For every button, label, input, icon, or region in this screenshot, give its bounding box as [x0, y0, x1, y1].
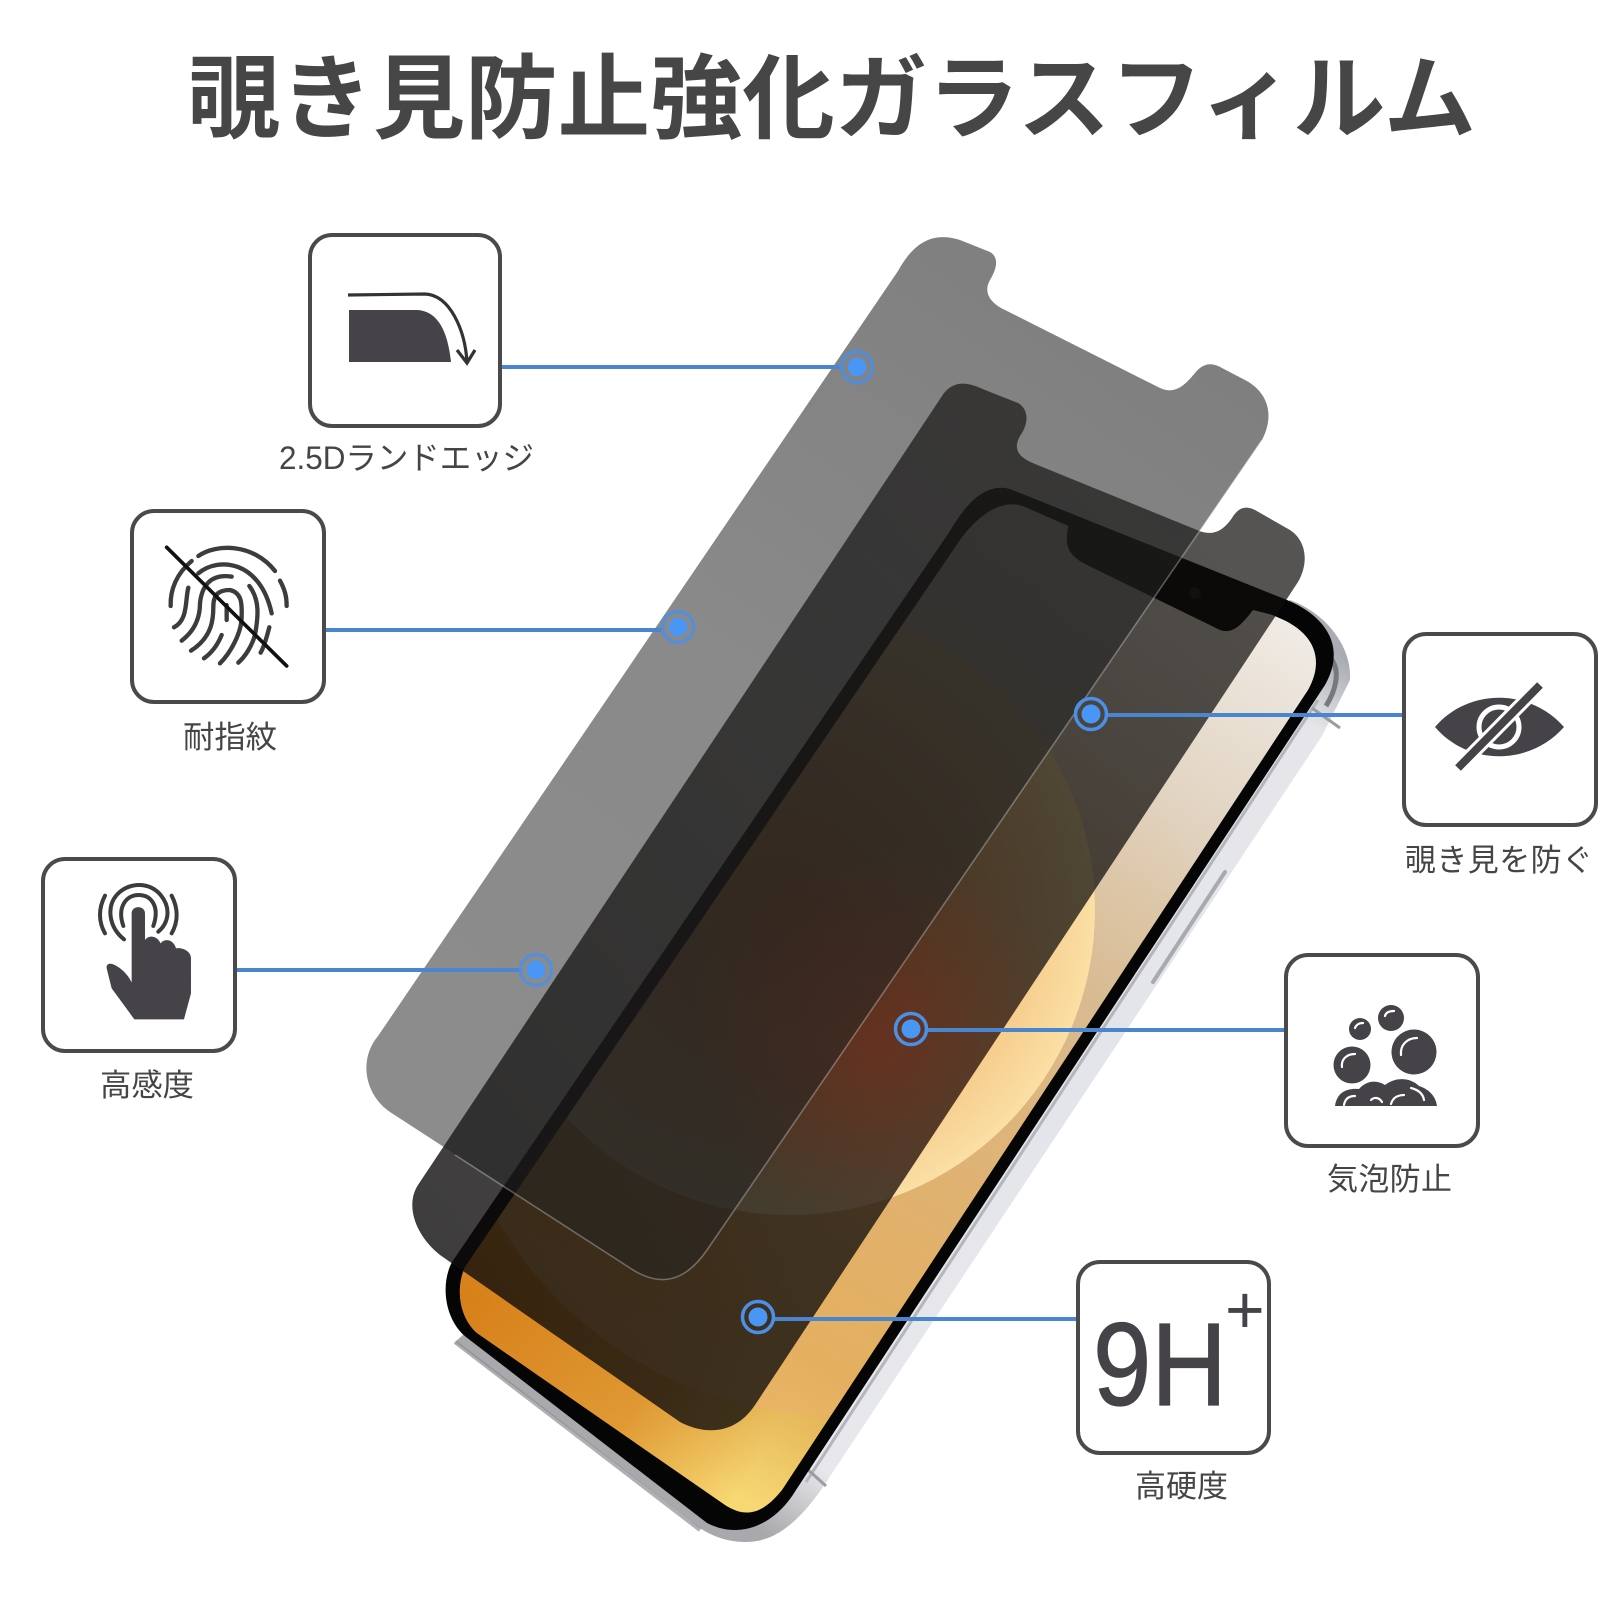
phone screen wallpaper [460, 504, 1316, 1512]
feature: high hardness [1078, 1262, 1269, 1504]
icon box [1078, 1262, 1269, 1453]
connector: anti fingerprint [323, 612, 694, 642]
feature: anti bubble [1286, 955, 1478, 1197]
screen notch [1060, 510, 1285, 631]
privacy film rear layer [412, 384, 1305, 1430]
phone body [455, 600, 1350, 1542]
connector: hardness [742, 1302, 1076, 1332]
phone bezel [446, 488, 1334, 1530]
icon box [1404, 634, 1596, 825]
label: 覗き見を防ぐ [1405, 843, 1593, 878]
icon box [1286, 955, 1478, 1146]
front camera [1189, 587, 1201, 599]
feature: 2.5D round edge [279, 235, 534, 476]
icon: 9H+: + [1225, 1272, 1265, 1348]
label: 耐指紋 [183, 720, 277, 755]
icon box [43, 859, 235, 1051]
wallpaper red tone through film [784, 916, 1013, 1180]
connector: round edge [500, 352, 872, 382]
label: 2.5Dランドエッジ [279, 440, 534, 476]
privacy film front layer [366, 237, 1268, 1280]
connector: high sensitivity [234, 954, 552, 986]
icon: crossed eye [1435, 685, 1564, 768]
icon box [132, 511, 324, 702]
icon: crossed fingerprint [167, 547, 287, 666]
side button [1153, 872, 1225, 982]
feature: privacy [1404, 634, 1596, 878]
icon box [310, 235, 500, 426]
phone illustration [400, 480, 1360, 1542]
icon: touch hand [100, 885, 191, 1019]
feature: anti fingerprint [132, 511, 324, 755]
body edge lines [455, 660, 1340, 1530]
connector: anti bubble [896, 1014, 1286, 1044]
icon: bubbles [1334, 1005, 1437, 1106]
icon: curved arrow [348, 294, 475, 363]
label: 高感度 [100, 1068, 194, 1103]
connector: privacy [1076, 698, 1404, 730]
feature: high sensitivity [43, 859, 235, 1103]
icon: 9H+: 9H [1093, 1299, 1227, 1431]
film edge highlight [455, 440, 1262, 1280]
icon: glass edge [349, 310, 451, 362]
label: 高硬度 [1135, 1469, 1228, 1504]
title: 覗き見防止強化ガラスフィルム [188, 49, 1476, 151]
label: 気泡防止 [1327, 1162, 1452, 1197]
